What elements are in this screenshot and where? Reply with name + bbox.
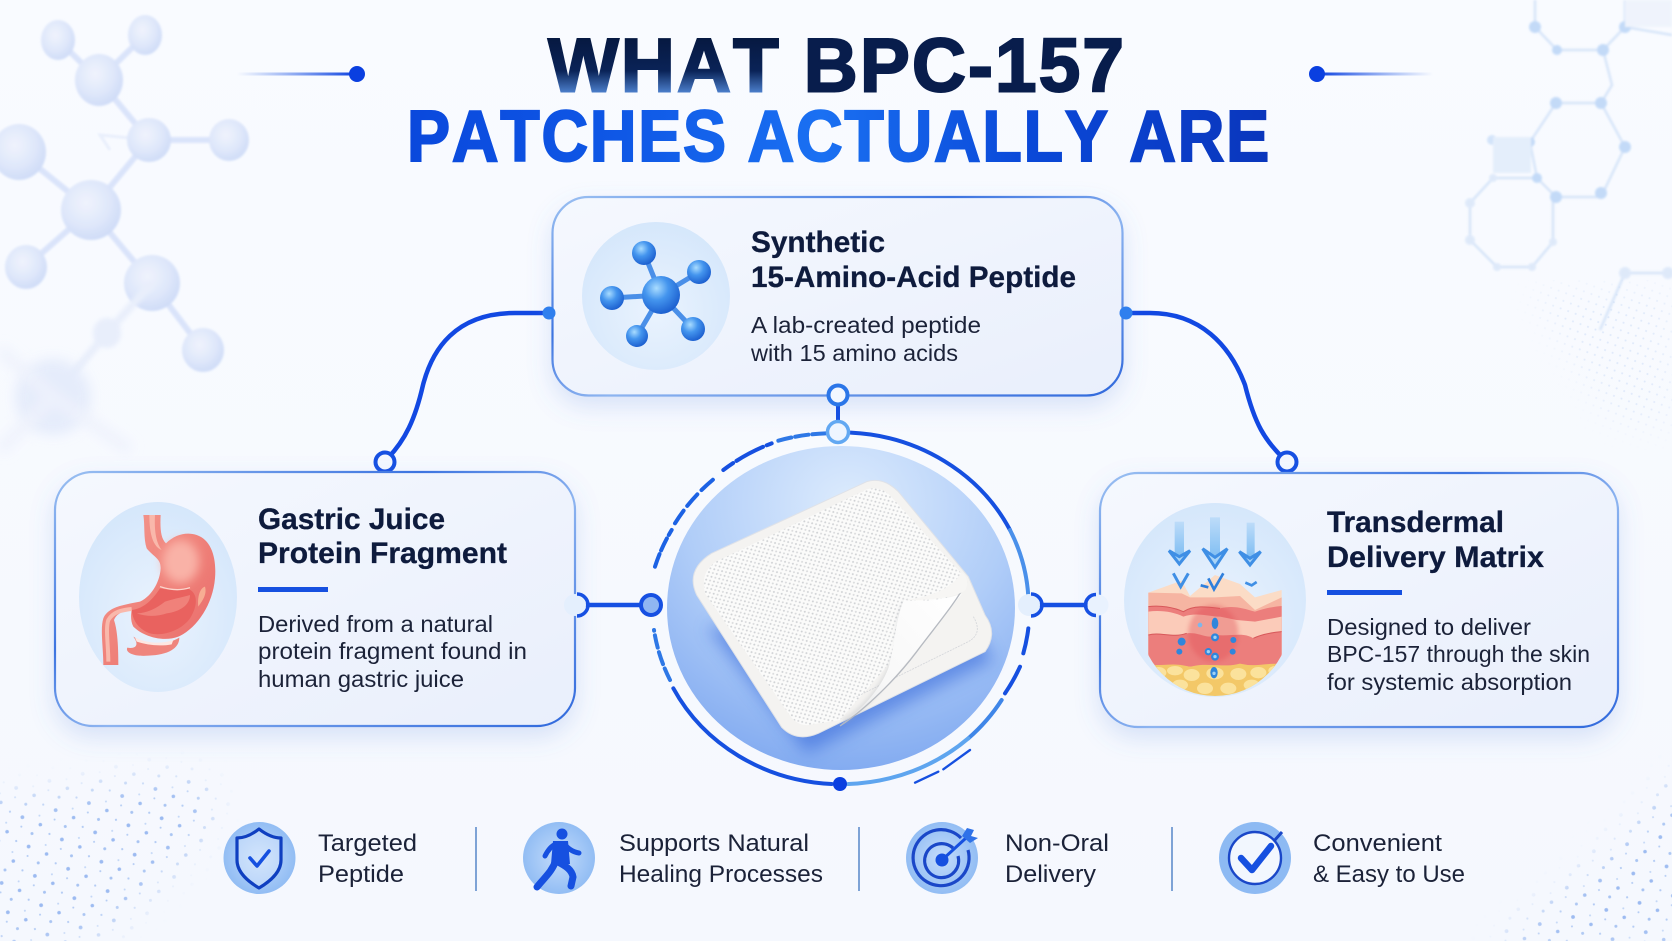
label: Supports Natural [619,830,809,857]
label: Delivery [1005,861,1096,888]
label: Targeted [318,830,417,857]
description: A lab-created peptide [751,312,981,338]
heading: Delivery Matrix [1327,541,1544,574]
label [619,830,823,888]
heading [1327,506,1544,574]
accent bar [258,587,328,592]
background: molecule left [0,15,249,450]
connector: top card to ring [828,386,848,442]
central patch illustration [654,433,1028,784]
divider [858,827,860,891]
icon: target [906,822,978,894]
label: Peptide [318,861,404,888]
description [750,312,981,366]
panel: synthetic peptide [542,197,1132,396]
heading: Synthetic [751,226,885,259]
title line 1: WHAT BPC-157 [548,24,1126,108]
description: with 15 amino acids [750,340,958,366]
heading [258,503,507,570]
label: Non-Oral [1005,830,1109,857]
label [318,830,417,888]
label [1313,830,1465,888]
feature: non-oral delivery [906,822,1109,894]
description [258,611,527,692]
icon: runner [523,822,595,894]
label [1005,830,1109,888]
connector: left card to ring [564,594,661,616]
icon: skin layers with arrows [1124,503,1306,698]
divider [1171,827,1173,891]
heading: Transdermal [1327,506,1504,539]
heading: Gastric Juice [258,503,445,536]
heading: 15-Amino-Acid Peptide [751,261,1076,294]
title line 2: PATCHES ACTUALLY ARE [407,97,1271,177]
icon: check circle [1219,822,1291,894]
background: dotted waves [0,280,1672,941]
feature row [224,822,1465,894]
ring node bottom [833,777,847,791]
icon: molecule [582,222,730,370]
description: protein fragment found in [258,638,527,664]
feature: convenient [1219,822,1465,894]
connector: top card to right card [1125,313,1296,472]
ring [654,433,1028,784]
label: Convenient [1313,830,1442,857]
panel: transdermal delivery [1100,473,1618,727]
description: BPC-157 through the skin [1327,641,1590,667]
description: Derived from a natural [258,611,493,637]
description: human gastric juice [258,666,464,692]
connector node [1120,306,1132,320]
feature: natural healing [523,822,823,894]
label: & Easy to Use [1313,861,1465,888]
heading: Protein Fragment [258,537,507,570]
title decoration: right line [1309,66,1433,82]
patch [693,480,993,753]
title decoration: left line [237,66,365,82]
connector: right card to ring [1018,594,1108,616]
accent bar [1327,590,1402,595]
disc [667,446,1015,770]
description: for systemic absorption [1327,669,1572,695]
description [1327,614,1590,695]
icon: shield [224,822,296,894]
label: Healing Processes [619,861,823,888]
background: hexagon network right [1465,0,1672,330]
panel: gastric juice fragment [55,472,575,726]
icon: stomach [79,502,237,692]
heading [751,226,1076,294]
feature: targeted peptide [224,822,417,894]
divider [475,827,477,891]
title [237,24,1433,177]
connector: top card to left card [376,313,549,472]
description: Designed to deliver [1327,614,1531,640]
connector node [542,306,556,320]
